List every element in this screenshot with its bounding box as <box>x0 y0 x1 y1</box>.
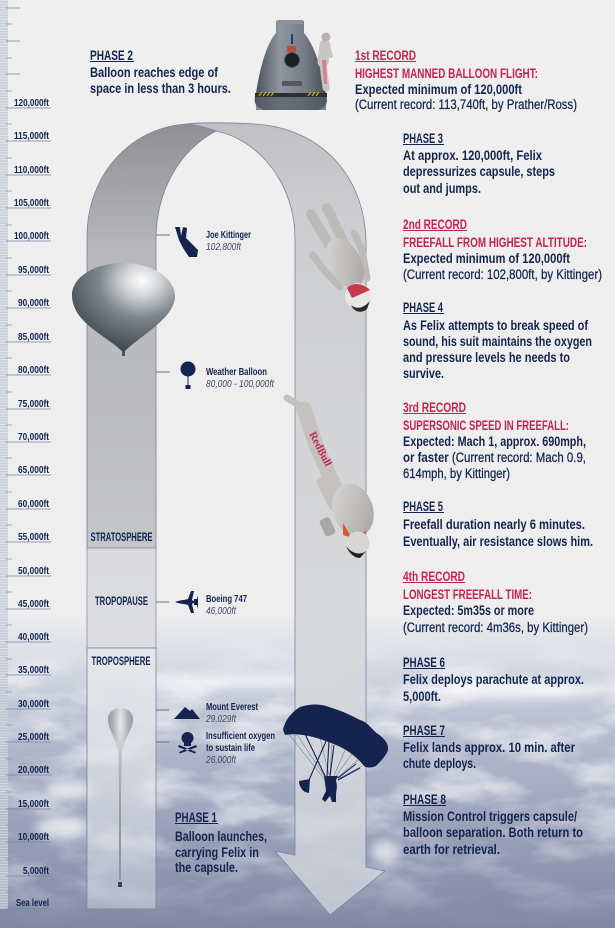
text: phase 6: PHASE 6 <box>403 654 445 670</box>
text: 2nd record: Expected minimum of 120,000ft <box>403 251 570 266</box>
flight path ribbon <box>87 123 385 915</box>
text: phase 1: carrying Felix in <box>175 845 259 860</box>
text: 4th record: 4th RECORD <box>403 569 465 584</box>
label: Joe Kittinger: 102,800ft <box>206 241 242 253</box>
text: 1st record: HIGHEST MANNED BALLOON FLIGHT: <box>355 66 538 81</box>
label: insufficient oxygen <box>205 730 275 766</box>
atmosphere labels <box>90 532 153 668</box>
text: 4th record: Expected: 5m35s or more <box>403 603 534 618</box>
text: 4th record: LONGEST FREEFALL TIME: <box>403 587 532 602</box>
text: 1st record: Expected minimum of 120,000ft <box>355 82 522 97</box>
label: Boeing 747: 46,000ft <box>206 605 237 617</box>
altitude labels: 100,000ft <box>14 230 49 242</box>
ascending band upper <box>87 124 216 548</box>
capsule body <box>255 21 327 110</box>
label: Mount Everest: Mount Everest <box>206 701 258 713</box>
label: insufficient oxygen: to sustain life <box>206 742 255 754</box>
altitude labels: 10,000ft <box>18 831 49 843</box>
large balloon <box>72 263 175 356</box>
suit lettering: RedBull <box>306 430 334 468</box>
label: Mount Everest <box>205 701 258 725</box>
background: sky and clouds <box>0 628 615 928</box>
astronaut on capsule <box>323 45 331 88</box>
text: phase 8: PHASE 8 <box>403 791 446 807</box>
altitude labels: 15,000ft <box>18 798 49 810</box>
text: phase 2: PHASE 2 <box>90 47 133 63</box>
parachutist silhouette <box>283 704 388 802</box>
label: insufficient oxygen: 26,000ft <box>205 754 237 766</box>
text: phase 8 <box>403 791 583 857</box>
text: 1st record: 1st RECORD <box>355 48 416 63</box>
text: phase 4: survive. <box>403 366 444 381</box>
altitude labels: 120,000ft <box>14 97 49 109</box>
text: 2nd record <box>403 217 602 282</box>
altitude labels: Sea level <box>16 897 49 909</box>
text: phase 3: At approx. 120,000ft, Felix <box>403 148 542 163</box>
text: 3rd record: or faster (Current record: Mach 0.9, <box>403 450 586 465</box>
major tick lines <box>6 8 51 909</box>
descending band with arrow <box>186 123 385 915</box>
altitude labels: 85,000ft <box>18 331 49 343</box>
text: phase 2: space in less than 3 hours. <box>90 81 231 96</box>
altitude labels: 40,000ft <box>18 631 49 643</box>
text: 4th record <box>403 569 588 635</box>
text: 3rd record: 3rd RECORD <box>403 400 466 415</box>
altitude labels: 50,000ft <box>18 565 49 577</box>
icon: skull and crossbones <box>178 732 197 754</box>
text: phase 3: PHASE 3 <box>403 130 443 146</box>
text: phase 1: the capsule. <box>175 860 238 875</box>
text: phase 8: balloon separation. Both return to <box>403 825 583 840</box>
altitude labels: 30,000ft <box>18 698 49 710</box>
text: phase 3: out and jumps. <box>403 181 481 196</box>
altitude labels <box>14 97 49 909</box>
text: phase 4 <box>403 299 592 381</box>
text: phase 7: PHASE 7 <box>403 722 445 738</box>
small balloon and tether <box>108 708 133 887</box>
text: phase 7: chute deploys. <box>403 756 476 771</box>
text: phase 5: PHASE 5 <box>403 498 443 514</box>
altitude labels: 5,000ft <box>23 865 49 877</box>
altitude labels: 65,000ft <box>18 464 49 476</box>
text: phase 3 <box>403 130 555 196</box>
altitude labels: 60,000ft <box>18 498 49 510</box>
altitude labels: 45,000ft <box>18 598 49 610</box>
label: weather balloon: Weather Balloon <box>206 366 267 378</box>
text: phase 1 <box>175 809 267 875</box>
text: phase 5 <box>403 498 593 549</box>
altitude labels: 20,000ft <box>18 764 49 776</box>
text: 3rd record <box>403 400 586 481</box>
capsule with astronaut <box>255 20 331 110</box>
altitude labels: 105,000ft <box>14 197 49 209</box>
jumper <box>322 776 338 802</box>
atmosphere labels: STRATOSPHERE <box>90 532 153 544</box>
label: weather balloon: 80,000 - 100,000ft <box>206 378 275 390</box>
figure: freefall dive with Red Bull suit <box>287 398 380 558</box>
text: phase 4: and pressure levels he needs to <box>403 350 570 365</box>
text: phase 1: Balloon launches, <box>175 829 267 844</box>
altitude labels: 55,000ft <box>18 531 49 543</box>
connector ticks <box>156 235 170 742</box>
label: Boeing 747 <box>206 593 247 617</box>
text: phase 7: Felix lands approx. 10 min. after <box>403 740 576 755</box>
altitude labels: 110,000ft <box>14 164 49 176</box>
altitude labels: 70,000ft <box>18 431 49 443</box>
text: phase 3: depressurizes capsule, steps <box>403 164 555 179</box>
altitude labels: 90,000ft <box>18 297 49 309</box>
text: phase 8: Mission Control triggers capsule/ <box>403 809 577 824</box>
text: phase 1: PHASE 1 <box>175 809 217 825</box>
text: phase 8: earth for retrieval. <box>403 842 500 857</box>
icon: weather balloon <box>180 362 196 389</box>
text: phase 6 <box>403 654 584 704</box>
text: 2nd record: 2nd RECORD <box>403 217 467 232</box>
altitude scale <box>0 0 51 909</box>
icon: mountain <box>174 707 200 719</box>
atmosphere labels: TROPOPAUSE <box>95 596 148 608</box>
text: phase 2: Balloon reaches edge of <box>90 65 218 80</box>
altitude labels: 25,000ft <box>18 731 49 743</box>
label: Joe Kittinger: Joe Kittinger <box>206 229 251 241</box>
label: Joe Kittinger <box>206 229 251 253</box>
canopy <box>283 704 388 768</box>
altitude labels: 35,000ft <box>18 664 49 676</box>
label: insufficient oxygen: Insufficient oxygen <box>206 730 275 742</box>
pilot bag <box>299 779 310 793</box>
icon: airplane <box>175 591 198 613</box>
altitude labels: 95,000ft <box>18 264 49 276</box>
tropopause section <box>87 548 156 648</box>
altitude labels: 115,000ft <box>14 130 49 142</box>
troposphere section <box>87 648 156 909</box>
scale ticks <box>0 0 8 909</box>
altitude labels: 80,000ft <box>18 364 49 376</box>
label: Mount Everest: 29,029ft <box>205 713 237 725</box>
icon: Joe Kittinger freefall <box>175 227 198 257</box>
text: phase 6: 5,000ft. <box>403 689 441 704</box>
altitude labels: 75,000ft <box>18 398 49 410</box>
text: phase 4: PHASE 4 <box>403 299 443 315</box>
text: 3rd record: 614mph, by Kittinger) <box>403 466 510 481</box>
label: Boeing 747: Boeing 747 <box>206 593 247 605</box>
text: phase 2 <box>90 47 231 96</box>
text: 1st record <box>355 48 577 112</box>
text: 1st record: (Current record: 113,740ft, by Prather/Ross) <box>355 97 577 112</box>
text: phase 7 <box>403 722 576 771</box>
figure: freefall spread <box>311 208 372 312</box>
atmosphere labels: TROPOSPHERE <box>92 656 151 668</box>
label: weather balloon <box>206 366 275 390</box>
